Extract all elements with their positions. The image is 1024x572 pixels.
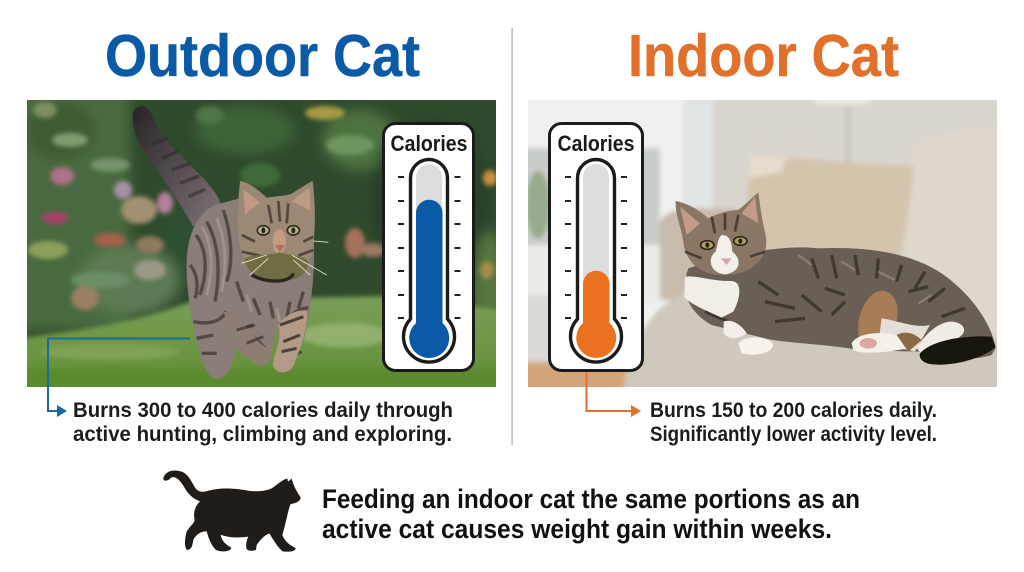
arrow: indoor callout connector [586, 372, 641, 417]
arrow: outdoor callout connector [48, 338, 190, 417]
text block: outdoor calories: active hunting, climbing and exploring. [73, 422, 452, 446]
thermometer card [384, 124, 474, 370]
thermometer card [550, 124, 642, 370]
photo background: garden [27, 100, 496, 341]
pillow [745, 158, 913, 262]
photo background: lawn [20, 296, 500, 395]
icon: overweight cat silhouette [163, 470, 301, 552]
tabby cat lying on sofa [676, 192, 996, 365]
fill level [576, 271, 616, 358]
text block: outdoor calories: Burns 300 to 400 calories daily through [73, 398, 453, 422]
tube empty track [583, 164, 609, 325]
thermometer label: Calories [390, 131, 468, 156]
sofa seat [620, 294, 997, 387]
panel: indoor cat photo [528, 100, 997, 387]
text block: takeaway message: Feeding an indoor cat the same portions as an [322, 484, 860, 514]
fill level [409, 200, 449, 358]
sofa arm [660, 208, 770, 300]
photo background: room [711, 100, 997, 260]
thermometer tube and bulb [571, 160, 622, 362]
thermometer tube and bulb [404, 160, 454, 362]
tick marks [398, 177, 460, 318]
thermometer: indoor calories low [550, 124, 642, 370]
tube empty track [416, 164, 442, 325]
thermometer label: Calories [558, 131, 634, 156]
tick marks [565, 177, 627, 318]
text block: indoor calories: Burns 150 to 200 calories daily. [650, 398, 937, 422]
text block: indoor calories [650, 398, 937, 446]
title: Outdoor Cat: Outdoor Cat [105, 23, 420, 89]
text block: indoor calories: Significantly lower activity level. [650, 422, 937, 446]
text block: outdoor calories [73, 398, 453, 446]
tabby cat walking [133, 106, 328, 379]
sofa back [969, 297, 997, 338]
center divider [512, 28, 513, 445]
title: Indoor Cat: Indoor Cat [628, 23, 899, 89]
panel: outdoor cat photo [27, 100, 496, 387]
text block: takeaway message: active cat causes weight gain within weeks. [322, 514, 832, 544]
thermometer: outdoor calories high [384, 124, 474, 370]
text block: takeaway message [322, 484, 860, 544]
